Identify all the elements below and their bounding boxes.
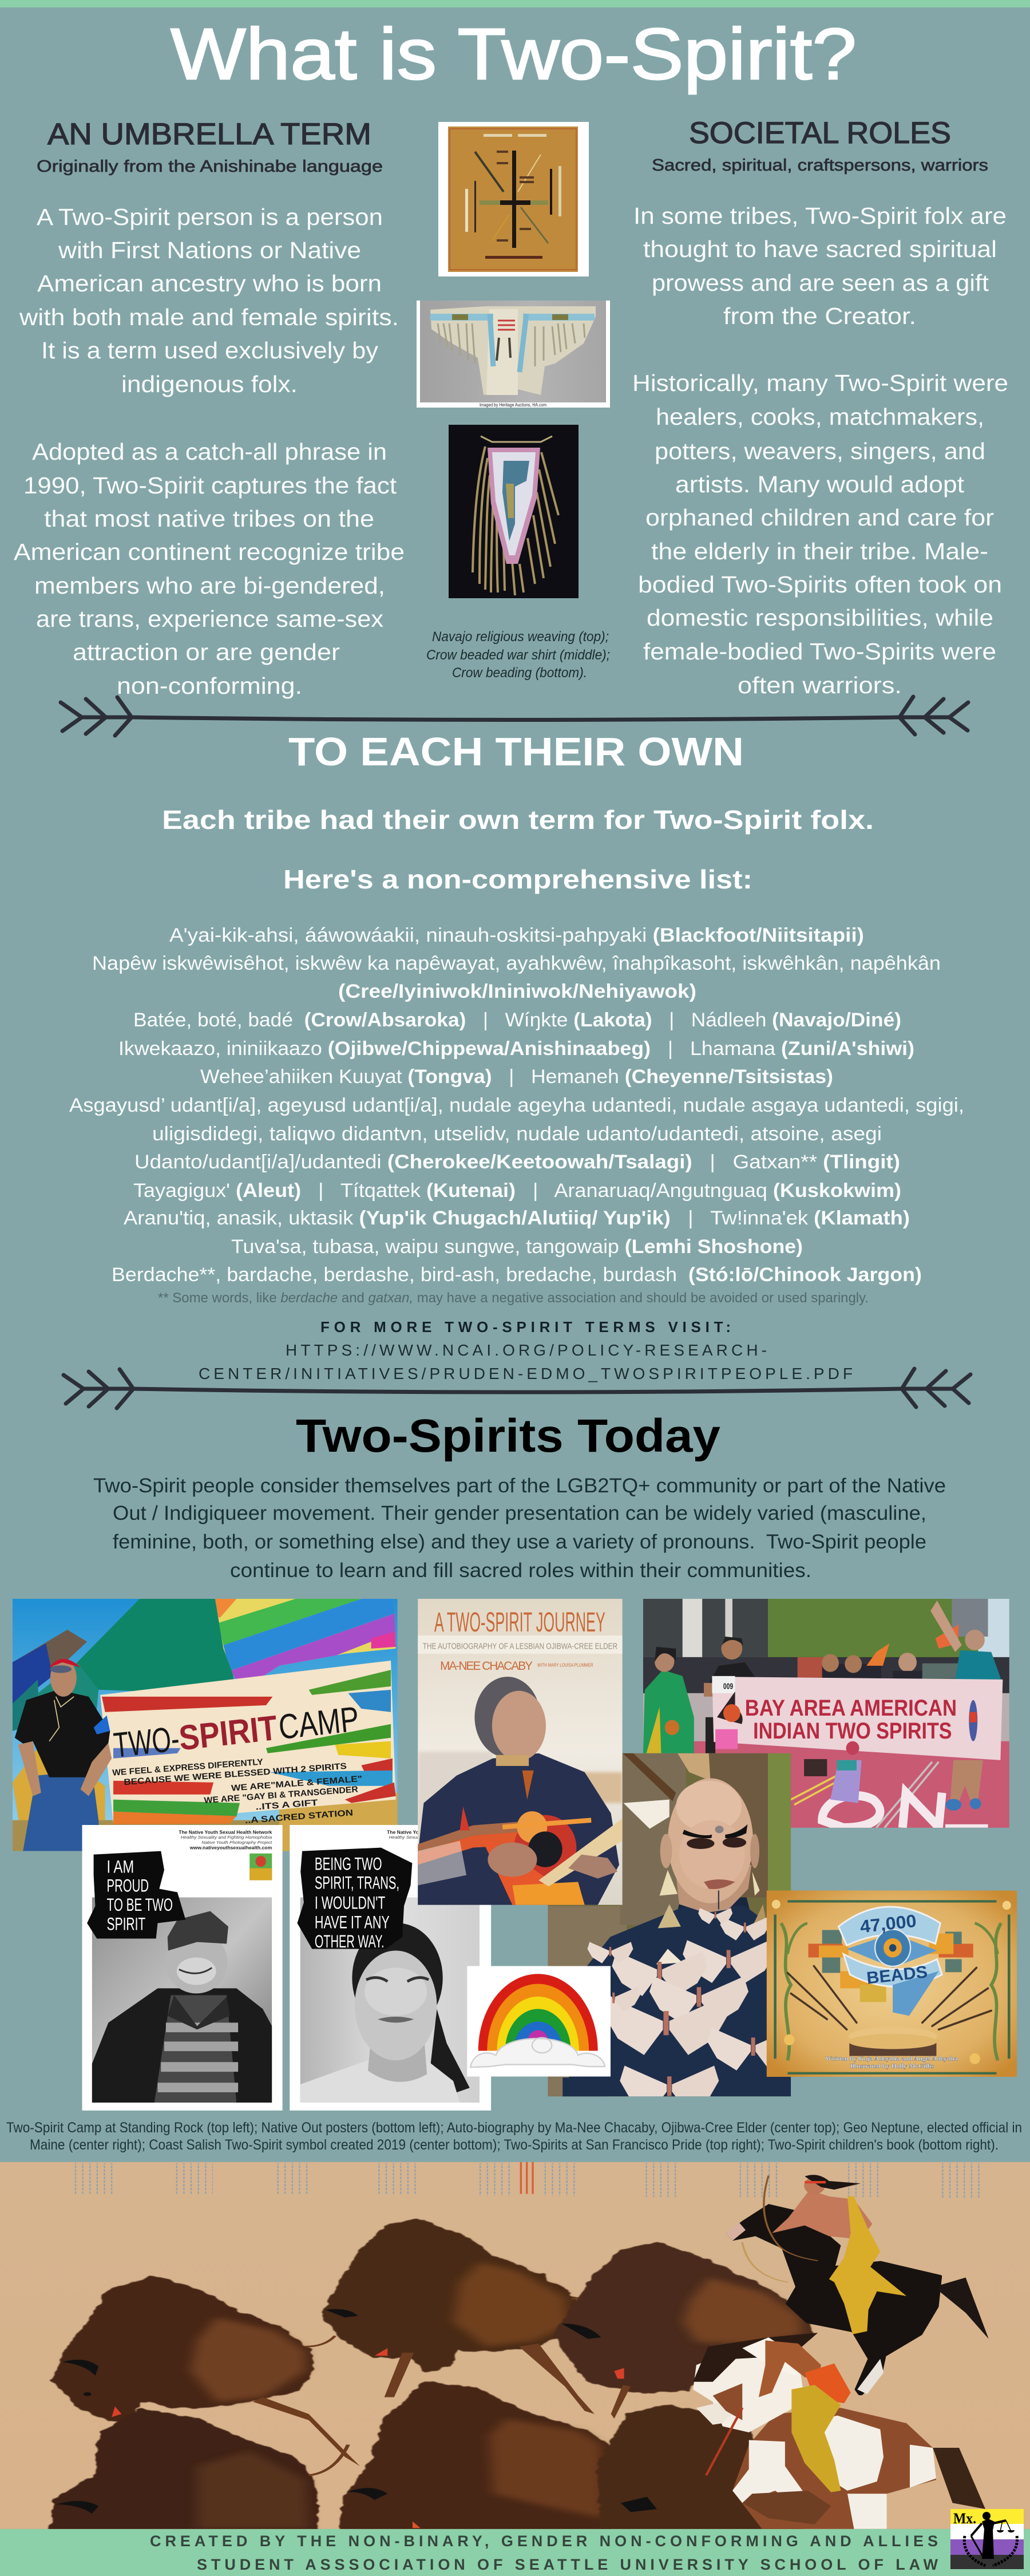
- heading: an umbrella term: AN UMBRELLA TERM: [47, 117, 371, 151]
- photo: Two-Spirit Camp at Standing Rock: BECAUSE WE WERE BLESSED WITH 2 SPIRITS: [124, 1762, 347, 1787]
- text block: catch-all phrase: [14, 438, 405, 699]
- top green band: [0, 0, 1030, 7]
- poster: being Two-Spirit, trans: [290, 1825, 491, 2111]
- panel: an umbrella term: [14, 117, 405, 699]
- buffalo: upper right: [558, 2244, 808, 2419]
- text block: list of tribal terms: Berdache**, bardache, berdashe, bird-ash, bredache, burdash (Stó:lō/Chinook Jargon): [112, 1264, 922, 1286]
- image: Crow beaded war shirt: [417, 301, 610, 408]
- text block: catch-all phrase: non-conforming.: [117, 673, 302, 699]
- text block: spiritual prowess: prowess and are seen as a gift: [652, 270, 989, 296]
- text block: list of tribal terms: [69, 924, 964, 1286]
- horse: black with rider: [726, 2175, 989, 2394]
- text block: list of tribal terms: Aranu'tiq, anasik, uktasik (Yup'ik Chugach/Alutiiq/ Yup'ik) | Tw!inna'ek (Klamath): [124, 1207, 910, 1229]
- text block: definition: with First Nations or Native: [58, 237, 361, 263]
- text block: historic roles: artists. Many would adopt: [675, 471, 965, 497]
- text block: historic roles: potters, weavers, singers, and: [655, 438, 985, 464]
- buffalo: lower right: [601, 2407, 831, 2532]
- image: 47,000 Beads children's book: Illustrated by Holly McGillis: [850, 2063, 934, 2070]
- text block: spiritual prowess: In some tribes, Two-Spirit folx are: [633, 203, 1007, 229]
- text block: definition: It is a term used exclusively by: [41, 337, 379, 364]
- text block: definition: indigenous folx.: [121, 371, 298, 397]
- book cover: A Two-Spirit Journey: MA-NEE CHACABY: [440, 1660, 533, 1673]
- footer credit text: [150, 2532, 938, 2573]
- symbol: Coast Salish Two-Spirit: [467, 1966, 611, 2128]
- text block: definition: American ancestry who is born: [37, 270, 382, 297]
- text block: catch-all phrase: members who are bi-gendered,: [34, 572, 385, 599]
- logo: Mx. non-binary flag with justice figure: Mx.: [953, 2510, 976, 2527]
- photo: San Francisco Pride: [643, 1599, 1009, 1828]
- image: Navajo religious weaving: [438, 122, 589, 276]
- text block: two-spirits today description: feminine, both, or something else) and they use a variety of pronouns. Two-Spirit people: [113, 1531, 926, 1553]
- text block: spiritual prowess: [633, 203, 1007, 329]
- poster: being Two-Spirit, trans: OTHER WAY.: [315, 1931, 385, 1951]
- text block: list of tribal terms: Wehee’ahiiken Kuuyat (Tongva) | Hemaneh (Cheyenne/Tsitsistas): [200, 1066, 833, 1088]
- poster: I am proud to be Two-Spirit: TO BE TWO: [107, 1894, 173, 1915]
- caption: photo credits: [6, 2120, 1022, 2153]
- text block: two-spirits today description: continue to learn and fill sacred roles within their communities.: [230, 1559, 811, 1582]
- subheading: non-comprehensive list: Here's a non-comprehensive list:: [283, 864, 752, 894]
- arrow divider two: [64, 1369, 970, 1408]
- image: 47,000 Beads children's book: 47,000: [859, 1911, 917, 1937]
- text block: historic roles: often warriors.: [738, 672, 902, 698]
- poster: I am proud to be Two-Spirit: Healthy Sexuality and Fighting Homophobia: [181, 1836, 272, 1840]
- photo: Two-Spirit Camp at Standing Rock: WE ARE"MALE & FEMALE": [231, 1775, 363, 1793]
- text block: list of tribal terms: Tayagigux' (Aleut) | Títqattek (Kutenai) | Aranaruaq/Angutnguaq (Kuskokwim): [133, 1180, 901, 1202]
- photo: Two-Spirit Camp at Standing Rock: WE ARE "GAY BI & TRANSGENDER: [204, 1785, 359, 1805]
- text block: two-spirits today description: Out / Indigiqueer movement. Their gender presentation can be widely varied (masculine,: [113, 1502, 926, 1524]
- text block: catch-all phrase: Adopted as a catch-all phrase in: [32, 438, 387, 465]
- text block: catch-all phrase: are trans, experience same-sex: [36, 606, 384, 632]
- poster: I am proud to be Two-Spirit: Native Youth Photography Project: [201, 1841, 272, 1845]
- caption: artifacts: Crow beaded war shirt (middle);: [426, 647, 610, 663]
- caption: artifacts: Crow beading (bottom).: [452, 665, 587, 681]
- text block: list of tribal terms: Asgayusd’ udant[i/a], ageyusd udant[i/a], nudale ageyha udantedi, nudale asgaya udantedi, sgigi,: [69, 1095, 964, 1116]
- image: 47,000 Beads children's book: [767, 1891, 1017, 2077]
- photo: San Francisco Pride: BAY AREA AMERICAN: [745, 1696, 957, 1721]
- text block: list of tribal terms: (Cree/Iyiniwok/Ininiwok/Nehiyawok): [338, 981, 696, 1002]
- photo: San Francisco Pride: 009: [723, 1682, 733, 1692]
- text block: catch-all phrase: American continent recognize tribe: [14, 539, 405, 565]
- text block: definition: A Two-Spirit person is a person: [37, 204, 383, 230]
- section heading: to each their own: TO EACH THEIR OWN: [288, 729, 744, 774]
- book cover: A Two-Spirit Journey: THE AUTOBIOGRAPHY OF A LESBIAN OJIBWA-CREE ELDER: [423, 1642, 617, 1652]
- image: Crow beaded war shirt: Imaged by Heritage Auctions, HA.com: [480, 402, 546, 408]
- text block: definition: [19, 204, 399, 397]
- caption: artifacts: Navajo religious weaving (top);: [432, 629, 609, 645]
- poster: being Two-Spirit, trans: HAVE IT ANY: [315, 1912, 390, 1933]
- buffalo: lower middle: [345, 2383, 608, 2532]
- text block: historic roles: Historically, many Two-Spirit were: [632, 370, 1008, 396]
- poster: I am proud to be Two-Spirit: www.nativeyouthsexualhealth.com: [189, 1845, 272, 1851]
- title: What is Two-Spirit?: [171, 13, 857, 94]
- link block: more terms: [199, 1318, 853, 1382]
- poster: I am proud to be Two-Spirit: SPIRIT: [107, 1914, 145, 1934]
- book cover: A Two-Spirit Journey: [418, 1599, 623, 1905]
- photo: Two-Spirit Camp at Standing Rock: ..ITS A GIFT: [255, 1798, 318, 1812]
- panel: societal roles: [632, 116, 1008, 698]
- image: 47,000 Beads children's book: Written by Koja Adeyoha and Angel Adeyoha: [825, 2056, 958, 2062]
- photo: Two-Spirit Camp at Standing Rock: ..A SACRED STATION: [245, 1808, 354, 1826]
- buffalo: upper left: [56, 2278, 360, 2466]
- photo: San Francisco Pride: INDIAN TWO SPIRITS: [753, 1718, 952, 1744]
- photo: Two-Spirit Camp at Standing Rock: CAMP: [277, 1699, 360, 1747]
- horse: pinto with rider: [693, 2333, 985, 2529]
- photo: Two-Spirit Camp at Standing Rock: TWO-: [112, 1719, 181, 1765]
- poster: being Two-Spirit, trans: I WOULDN'T: [315, 1893, 385, 1913]
- image: 47,000 Beads children's book: BEADS: [866, 1962, 928, 1988]
- footnote: negative association: ** Some words, like berdache and gatxan, may have a negative association and should be avoided or used sparingly.: [158, 1290, 869, 1306]
- text block: list of tribal terms: Tuva'sa, tubasa, waipu sungwe, tangowaip (Lemhi Shoshone): [231, 1236, 803, 1258]
- text block: catch-all phrase: attraction or are gender: [73, 639, 340, 665]
- logo: Mx. non-binary flag with justice figure: [950, 2509, 1024, 2569]
- photo: Two-Spirit Camp at Standing Rock: WE FEEL & EXPRESS DIFERENTLY: [112, 1757, 264, 1778]
- subheading: roles list: Sacred, spiritual, craftspersons, warriors: [652, 156, 988, 175]
- photo: Geo Neptune: [548, 1753, 799, 2112]
- text block: list of tribal terms: A'yai-kik-ahsi, áá́wowáakii, ninauh-oskitsi-pahpyaki (Blackfoot/Niitsitapii): [169, 924, 864, 946]
- text block: historic roles: female-bodied Two-Spirits were: [643, 638, 996, 665]
- text block: historic roles: [632, 370, 1008, 698]
- subheading: origin: Originally from the Anishinabe language: [37, 157, 383, 176]
- footer credit text: STUDENT ASSSOCIATION OF SEATTLE UNIVERSITY SCHOOL OF LAW: [197, 2556, 938, 2573]
- buffalo: upper middle: [325, 2221, 595, 2414]
- text block: list of tribal terms: Napêw iskwêwisêhot, iskwêw ka napêwayat, ayahkwêw, înahpîkasoht, iskwêhkân, napêhkân: [92, 953, 941, 974]
- text block: list of tribal terms: Udanto/udant[i/a]/udantedi (Cherokee/Keetoowah/Tsalagi) | Gatxan** (Tlingit): [134, 1151, 900, 1173]
- text block: catch-all phrase: that most native tribes on the: [44, 505, 374, 532]
- text block: historic roles: the elderly in their tribe. Male-: [651, 538, 988, 564]
- photo: Two-Spirit Camp at Standing Rock: [13, 1599, 401, 1851]
- poster: I am proud to be Two-Spirit: [82, 1825, 283, 2111]
- text block: historic roles: healers, cooks, matchmakers,: [656, 404, 984, 430]
- link block: more terms: FOR MORE TWO-SPIRIT TERMS VISIT:: [320, 1318, 731, 1336]
- heading: societal roles: SOCIETAL ROLES: [689, 116, 951, 150]
- buffalo: lower left: [53, 2411, 348, 2532]
- book cover: A Two-Spirit Journey: WITH MARY LOUISA PLUMMER: [537, 1663, 593, 1668]
- text block: two-spirits today description: Two-Spirit people consider themselves part of the LGB2TQ+ community or part of the Native: [93, 1475, 946, 1497]
- footer credit text: CREATED BY THE NON-BINARY, GENDER NON-CONFORMING AND ALLIES: [150, 2532, 938, 2550]
- text block: list of tribal terms: Ikwekaazo, ininiikaazo (Ojibwe/Chippewa/Anishinaabeg) | Lhamana (Zuni/A'shiwi): [118, 1038, 914, 1060]
- poster: being Two-Spirit, trans: Healthy Sexuality and Fighting Homophobia: [389, 1836, 480, 1840]
- link block: more terms: HTTPS://WWW.NCAI.ORG/POLICY-RESEARCH-: [286, 1341, 767, 1359]
- text block: list of tribal terms: Batée, boté, badé (Crow/Absaroka) | Wíŋkte (Lakota) | Nádleeh (Navajo/Diné): [133, 1009, 901, 1031]
- poster: I am proud to be Two-Spirit: PROUD: [107, 1875, 149, 1895]
- text block: historic roles: orphaned children and care for: [645, 504, 994, 531]
- section heading: two-spirits today: Two-Spirits Today: [296, 1410, 720, 1462]
- text block: two-spirits today description: [93, 1475, 946, 1582]
- photo: Two-Spirit Camp at Standing Rock: SPIRIT: [177, 1708, 279, 1758]
- poster: I am proud to be Two-Spirit: The Native Youth Sexual Health Network: [179, 1830, 272, 1835]
- caption: artifacts: [426, 629, 610, 681]
- subheading: each tribe: Each tribe had their own term for Two-Spirit folx.: [162, 805, 874, 835]
- footer band: [0, 2529, 1030, 2576]
- book cover: A Two-Spirit Journey: A TWO-SPIRIT JOURNEY: [434, 1606, 605, 1637]
- text block: catch-all phrase: 1990, Two-Spirit captures the fact: [23, 472, 397, 499]
- poster: being Two-Spirit, trans: SPIRIT, TRANS,: [315, 1872, 399, 1893]
- painting: buffalo hunt: [0, 2162, 1030, 2532]
- text block: historic roles: domestic responsibilities, while: [647, 605, 993, 631]
- poster: being Two-Spirit, trans: The Native Youth Sexual Health Network: [387, 1830, 481, 1835]
- arrow divider one: [61, 697, 968, 736]
- text block: definition: with both male and female spirits.: [19, 304, 399, 330]
- text block: list of tribal terms: uligisdidegi, taliqwo didantvn, utselidv, nudale udanto/udantedi, atsoine, asegi: [152, 1123, 882, 1145]
- link block: more terms: CENTER/INITIATIVES/PRUDEN-EDMO_TWOSPIRITPEOPLE.PDF: [199, 1365, 853, 1382]
- text block: spiritual prowess: from the Creator.: [723, 303, 916, 329]
- text block: historic roles: bodied Two-Spirits often took on: [638, 571, 1002, 598]
- poster: I am proud to be Two-Spirit: I AM: [107, 1856, 134, 1877]
- poster: being Two-Spirit, trans: BEING TWO: [315, 1854, 382, 1874]
- text block: spiritual prowess: thought to have sacred spiritual: [643, 236, 997, 262]
- image: Crow beading: [449, 425, 579, 598]
